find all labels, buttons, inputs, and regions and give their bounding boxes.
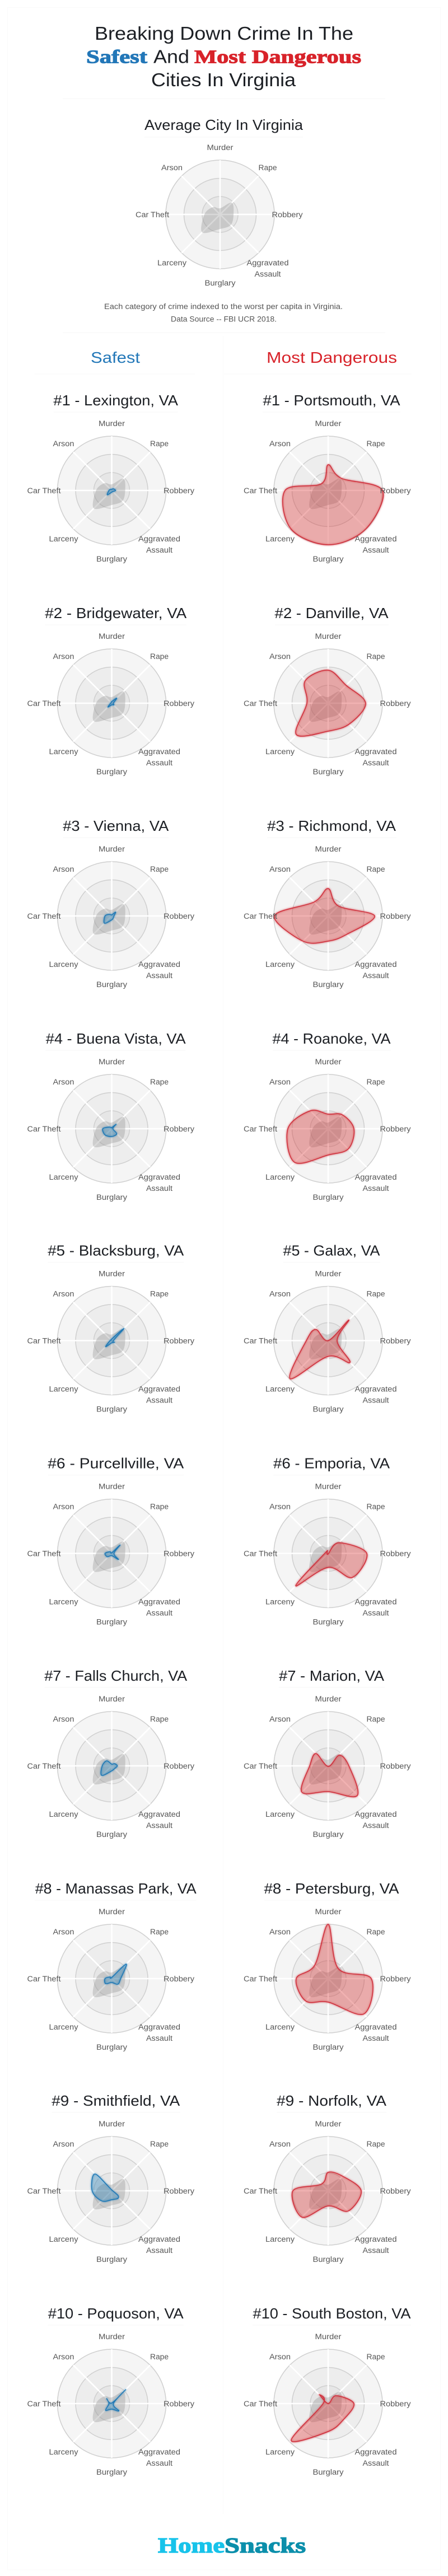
- heading: #3 - Richmond, VA: [267, 817, 396, 834]
- axis labels: Robbery: [380, 1550, 411, 1558]
- axis labels: Assault: [363, 1609, 389, 1617]
- axis labels: [244, 845, 411, 989]
- axis labels: Murder: [99, 419, 125, 428]
- heading: #9 - Smithfield, VA: [52, 2092, 180, 2109]
- axis labels: Assault: [363, 2034, 389, 2042]
- axis labels: Aggravated: [138, 2023, 180, 2031]
- city shape: [296, 1924, 373, 2014]
- axis labels: [27, 632, 194, 776]
- axis labels: Murder: [315, 1908, 342, 1916]
- city shape: [105, 1328, 124, 1347]
- axis labels: Assault: [146, 2459, 172, 2467]
- footnote: [104, 302, 343, 324]
- logo: HomeSnacks: [158, 2534, 306, 2558]
- axis labels: Burglary: [96, 1830, 127, 1839]
- axis labels: Robbery: [164, 1762, 194, 1770]
- axis labels: Rape: [150, 652, 169, 661]
- axis labels: Aggravated: [138, 1810, 180, 1818]
- axis labels: Rape: [366, 1928, 385, 1936]
- axis labels: Aggravated: [355, 2448, 396, 2456]
- axis labels: Rape: [366, 1503, 385, 1511]
- axis labels: Assault: [146, 1609, 172, 1617]
- axis labels: Larceny: [49, 1173, 78, 1181]
- axis labels: Assault: [363, 971, 389, 980]
- axis labels: Aggravated: [138, 747, 180, 756]
- axis labels: Burglary: [96, 1405, 127, 1413]
- axis labels: [244, 2120, 411, 2264]
- axis labels: Car Theft: [136, 211, 169, 219]
- axis labels: [244, 632, 411, 776]
- axis labels: Assault: [363, 1821, 389, 1830]
- axis labels: Larceny: [265, 535, 295, 543]
- axis labels: Assault: [363, 546, 389, 554]
- axis labels: Robbery: [272, 211, 303, 219]
- axis labels: Car Theft: [244, 1975, 277, 1983]
- panel: safest #3 Vienna: [27, 817, 194, 989]
- axis labels: [244, 1270, 411, 1413]
- axis labels: Murder: [99, 1058, 125, 1066]
- city shape: [105, 1964, 127, 1984]
- city shape: [104, 912, 116, 923]
- axis labels: Car Theft: [244, 1762, 277, 1770]
- axis labels: Arson: [269, 1078, 291, 1086]
- axis labels: Burglary: [312, 1405, 344, 1413]
- heading: #8 - Petersburg, VA: [264, 1880, 399, 1897]
- axis labels: [27, 1908, 194, 2051]
- axis labels: Arson: [269, 865, 291, 873]
- axis labels: Burglary: [312, 555, 344, 563]
- axis labels: Robbery: [164, 1125, 194, 1133]
- panel: safest #8 Manassas Park: [27, 1880, 197, 2051]
- axis labels: Car Theft: [244, 912, 277, 920]
- axis labels: Assault: [363, 2246, 389, 2255]
- axis labels: Arson: [161, 163, 183, 172]
- city shape: [108, 698, 117, 707]
- heading: #7 - Falls Church, VA: [44, 1667, 188, 1684]
- axis labels: Murder: [315, 632, 342, 641]
- axis labels: Robbery: [164, 487, 194, 495]
- axis labels: Robbery: [164, 2187, 194, 2195]
- axis labels: Car Theft: [27, 1762, 61, 1770]
- axis labels: Burglary: [312, 2043, 344, 2051]
- heading: #4 - Buena Vista, VA: [46, 1030, 186, 1047]
- axis labels: Burglary: [96, 1618, 127, 1626]
- axis labels: Robbery: [380, 1762, 411, 1770]
- axis labels: Burglary: [96, 1193, 127, 1201]
- axis labels: Arson: [269, 2353, 291, 2361]
- axis labels: Rape: [259, 163, 277, 172]
- axis labels: Aggravated: [355, 747, 396, 756]
- axis labels: Murder: [99, 1483, 125, 1490]
- axis labels: Murder: [99, 1270, 125, 1278]
- axis labels: Rape: [366, 440, 385, 448]
- panel: dangerous #7 Marion: [244, 1667, 411, 1839]
- axis labels: Burglary: [96, 2255, 127, 2264]
- logo: HomeSnacks: Home: [158, 2534, 225, 2558]
- axis labels: Rape: [366, 2140, 385, 2148]
- axis labels: Rape: [366, 2353, 385, 2361]
- radar chart: average city: [136, 143, 303, 287]
- axis labels: Robbery: [164, 1975, 194, 1983]
- axis labels: Arson: [269, 2140, 291, 2148]
- axis labels: [27, 2120, 194, 2264]
- axis labels: Arson: [269, 1290, 291, 1298]
- axis labels: Aggravated: [138, 535, 180, 543]
- axis labels: Murder: [99, 1908, 125, 1916]
- axis labels: Arson: [269, 1715, 291, 1723]
- city shape: [105, 2390, 126, 2411]
- heading: #4 - Roanoke, VA: [272, 1030, 391, 1047]
- axis labels: Larceny: [265, 1598, 295, 1606]
- axis labels: Arson: [269, 652, 291, 661]
- axis labels: Robbery: [164, 1550, 194, 1558]
- axis labels: Arson: [53, 2140, 74, 2148]
- axis labels: Arson: [269, 1928, 291, 1936]
- heading: #6 - Emporia, VA: [273, 1455, 390, 1471]
- axis labels: Larceny: [265, 1173, 295, 1181]
- panel: dangerous #9 Norfolk: [244, 2092, 411, 2264]
- axis labels: Aggravated: [355, 960, 396, 969]
- heading: #8 - Manassas Park, VA: [35, 1880, 197, 1897]
- city shape: [301, 1754, 358, 1797]
- axis labels: Larceny: [49, 960, 78, 969]
- axis labels: Rape: [366, 1715, 385, 1723]
- axis labels: Car Theft: [27, 699, 61, 708]
- column heading: safest: Safest: [91, 349, 140, 366]
- axis labels: Murder: [315, 845, 342, 853]
- axis labels: Car Theft: [244, 1125, 277, 1133]
- axis labels: Arson: [53, 652, 74, 661]
- axis labels: Car Theft: [244, 1550, 277, 1558]
- axis labels: Aggravated: [355, 1598, 396, 1606]
- axis labels: [136, 143, 303, 287]
- heading: #10 - Poquoson, VA: [48, 2305, 184, 2322]
- axis labels: Murder: [315, 1695, 342, 1703]
- axis labels: [27, 419, 194, 563]
- axis labels: Murder: [99, 845, 125, 853]
- axis labels: Robbery: [380, 2187, 411, 2195]
- axis labels: Larceny: [49, 2235, 78, 2243]
- axis labels: Rape: [366, 1078, 385, 1086]
- axis labels: Assault: [146, 1821, 172, 1830]
- axis labels: Aggravated: [246, 259, 289, 267]
- heading: #5 - Galax, VA: [283, 1242, 380, 1259]
- axis labels: Rape: [150, 1503, 169, 1511]
- axis labels: Murder: [315, 1270, 342, 1278]
- axis labels: Car Theft: [27, 487, 61, 495]
- axis labels: Larceny: [49, 535, 78, 543]
- city shape: [107, 489, 116, 495]
- heading: #10 - South Boston, VA: [253, 2305, 411, 2322]
- axis labels: Rape: [150, 1715, 169, 1723]
- panel: safest #1 Lexington: [27, 392, 194, 563]
- axis labels: Arson: [53, 440, 74, 448]
- axis labels: Car Theft: [27, 2400, 61, 2408]
- axis labels: Aggravated: [138, 2448, 180, 2456]
- axis labels: Car Theft: [27, 1550, 61, 1558]
- axis labels: Rape: [366, 865, 385, 873]
- axis labels: Aggravated: [138, 1173, 180, 1181]
- title: Cities In Virginia: [151, 69, 296, 90]
- axis labels: Car Theft: [27, 2187, 61, 2195]
- footnote: Each category of crime indexed to the worst per capita in Virginia.: [104, 302, 343, 311]
- axis labels: Murder: [99, 1695, 125, 1703]
- city shape: [292, 2172, 361, 2218]
- axis labels: Rape: [150, 1290, 169, 1298]
- heading: #1 - Lexington, VA: [53, 392, 179, 409]
- axis labels: Aggravated: [355, 2023, 396, 2031]
- axis labels: Burglary: [96, 768, 127, 776]
- axis labels: Aggravated: [138, 2235, 180, 2243]
- axis labels: [27, 1695, 194, 1839]
- panel: safest #5 Blacksburg: [27, 1242, 194, 1413]
- city shape: [274, 889, 375, 943]
- axis labels: Burglary: [96, 555, 127, 563]
- axis labels: Rape: [150, 2353, 169, 2361]
- panel: dangerous #10 South Boston: [244, 2305, 411, 2476]
- axis labels: [244, 1058, 411, 1201]
- axis labels: Arson: [269, 1503, 291, 1511]
- axis labels: Murder: [99, 632, 125, 641]
- axis labels: Robbery: [380, 1125, 411, 1133]
- heading: #2 - Danville, VA: [275, 605, 389, 621]
- axis labels: Burglary: [96, 2468, 127, 2476]
- axis labels: Arson: [53, 1715, 74, 1723]
- city shape: [296, 1542, 367, 1586]
- axis labels: Larceny: [265, 2023, 295, 2031]
- city shape: [291, 2395, 354, 2442]
- axis labels: Assault: [146, 971, 172, 980]
- title: Most Dangerous: [194, 47, 361, 67]
- city shape: [105, 1545, 120, 1560]
- axis labels: Aggravated: [355, 1173, 396, 1181]
- city shape: [101, 1761, 118, 1775]
- axis labels: Larceny: [157, 259, 186, 267]
- axis labels: [244, 1483, 411, 1626]
- heading: #3 - Vienna, VA: [63, 817, 169, 834]
- axis labels: Assault: [363, 2459, 389, 2467]
- title: Breaking Down Crime In The: [95, 23, 353, 44]
- axis labels: Car Theft: [27, 1125, 61, 1133]
- axis labels: Robbery: [380, 912, 411, 920]
- axis labels: [27, 1058, 194, 1201]
- axis labels: Assault: [146, 2034, 172, 2042]
- axis labels: Robbery: [380, 487, 411, 495]
- axis labels: Car Theft: [244, 699, 277, 708]
- axis labels: Car Theft: [27, 912, 61, 920]
- axis labels: Burglary: [96, 980, 127, 989]
- axis labels: Assault: [146, 546, 172, 554]
- axis labels: Robbery: [380, 1337, 411, 1345]
- panel: safest #4 Buena Vista: [27, 1030, 194, 1201]
- panel: dangerous #6 Emporia: [244, 1455, 411, 1626]
- footnote: Data Source -- FBI UCR 2018.: [171, 315, 277, 324]
- heading: #6 - Purcellville, VA: [48, 1455, 184, 1471]
- panel: safest #7 Falls Church: [27, 1667, 194, 1839]
- city shape: [287, 1110, 354, 1163]
- axis labels: Assault: [146, 2246, 172, 2255]
- axis labels: Rape: [366, 652, 385, 661]
- axis labels: Larceny: [265, 1810, 295, 1818]
- axis labels: Arson: [53, 2353, 74, 2361]
- city shape: [283, 465, 383, 545]
- axis labels: Arson: [53, 1928, 74, 1936]
- axis labels: [244, 1908, 411, 2051]
- axis labels: Murder: [315, 2332, 342, 2341]
- axis labels: Burglary: [312, 980, 344, 989]
- axis labels: Murder: [99, 2120, 125, 2128]
- axis labels: Aggravated: [138, 1598, 180, 1606]
- panel: safest #10 Poquoson: [27, 2305, 194, 2476]
- axis labels: Burglary: [204, 279, 236, 287]
- axis labels: Aggravated: [355, 1810, 396, 1818]
- axis labels: Burglary: [96, 2043, 127, 2051]
- heading: #2 - Bridgewater, VA: [45, 605, 187, 621]
- axis labels: Murder: [207, 143, 234, 152]
- axis labels: [244, 2332, 411, 2476]
- axis labels: Burglary: [312, 1618, 344, 1626]
- panel: dangerous #2 Danville: [244, 605, 411, 776]
- axis labels: Aggravated: [355, 535, 396, 543]
- axis labels: Burglary: [312, 2255, 344, 2264]
- axis labels: Aggravated: [138, 960, 180, 969]
- axis labels: Assault: [146, 1184, 172, 1193]
- city shape: [296, 670, 366, 736]
- axis labels: Aggravated: [355, 1385, 396, 1393]
- axis labels: Larceny: [49, 2448, 78, 2456]
- heading: average city: Average City In Virginia: [144, 116, 304, 133]
- axis labels: Robbery: [164, 699, 194, 708]
- axis labels: Arson: [53, 1290, 74, 1298]
- axis labels: Larceny: [49, 747, 78, 756]
- title: Safest: [86, 47, 148, 67]
- axis labels: Murder: [99, 2332, 125, 2341]
- axis labels: Larceny: [265, 2235, 295, 2243]
- axis labels: Burglary: [312, 1193, 344, 1201]
- axis labels: Larceny: [49, 2023, 78, 2031]
- axis labels: Rape: [150, 440, 169, 448]
- axis labels: Larceny: [265, 2448, 295, 2456]
- axis labels: Larceny: [265, 1385, 295, 1393]
- heading: #7 - Marion, VA: [279, 1667, 385, 1684]
- axis labels: Robbery: [164, 1337, 194, 1345]
- axis labels: Murder: [315, 419, 342, 428]
- axis labels: Murder: [315, 1058, 342, 1066]
- panel: safest #6 Purcellville: [27, 1455, 194, 1626]
- axis labels: Car Theft: [27, 1337, 61, 1345]
- logo: HomeSnacks: Snacks: [225, 2534, 306, 2558]
- axis labels: Robbery: [380, 2400, 411, 2408]
- axis labels: Rape: [150, 1078, 169, 1086]
- axis labels: Larceny: [265, 747, 295, 756]
- axis labels: [27, 845, 194, 989]
- axis labels: Robbery: [380, 1975, 411, 1983]
- axis labels: Assault: [146, 1396, 172, 1404]
- axis labels: Car Theft: [244, 1337, 277, 1345]
- axis labels: Car Theft: [244, 2187, 277, 2195]
- axis labels: Arson: [53, 865, 74, 873]
- axis labels: Aggravated: [355, 2235, 396, 2243]
- panel: dangerous #5 Galax: [244, 1242, 411, 1413]
- panel: safest #2 Bridgewater: [27, 605, 194, 776]
- axis labels: [27, 1270, 194, 1413]
- axis labels: Assault: [146, 759, 172, 767]
- axis labels: Assault: [254, 270, 281, 278]
- city shape: [92, 2174, 119, 2201]
- axis labels: Larceny: [49, 1810, 78, 1818]
- axis labels: Assault: [363, 1396, 389, 1404]
- panel: dangerous #4 Roanoke: [244, 1030, 411, 1201]
- axis labels: Robbery: [380, 699, 411, 708]
- panel: dangerous #8 Petersburg: [244, 1880, 411, 2051]
- panel: dangerous #3 Richmond: [244, 817, 411, 989]
- panel: safest #9 Smithfield: [27, 2092, 194, 2264]
- axis labels: Larceny: [49, 1385, 78, 1393]
- axis labels: [244, 419, 411, 563]
- axis labels: Aggravated: [138, 1385, 180, 1393]
- city shape: [102, 1124, 117, 1137]
- heading: #1 - Portsmouth, VA: [263, 392, 400, 409]
- axis labels: Burglary: [312, 768, 344, 776]
- axis labels: Car Theft: [244, 2400, 277, 2408]
- heading: #9 - Norfolk, VA: [277, 2092, 387, 2109]
- axis labels: Robbery: [164, 2400, 194, 2408]
- axis labels: Car Theft: [27, 1975, 61, 1983]
- axis labels: Larceny: [49, 1598, 78, 1606]
- title: And: [153, 46, 189, 67]
- column heading: most dangerous: Most Dangerous: [267, 349, 397, 366]
- axis labels: Robbery: [164, 912, 194, 920]
- axis labels: Car Theft: [244, 487, 277, 495]
- axis labels: Arson: [53, 1078, 74, 1086]
- axis labels: [27, 2332, 194, 2476]
- axis labels: Assault: [363, 1184, 389, 1193]
- panel: dangerous #1 Portsmouth: [244, 392, 411, 563]
- axis labels: Larceny: [265, 960, 295, 969]
- axis labels: Burglary: [312, 2468, 344, 2476]
- axis labels: Murder: [315, 1483, 342, 1490]
- city shape: [290, 1320, 350, 1379]
- axis labels: Arson: [269, 440, 291, 448]
- axis labels: [27, 1483, 194, 1626]
- title: [86, 23, 361, 90]
- axis labels: Rape: [366, 1290, 385, 1298]
- axis labels: Rape: [150, 1928, 169, 1936]
- axis labels: Burglary: [312, 1830, 344, 1839]
- axis labels: Rape: [150, 865, 169, 873]
- heading: #5 - Blacksburg, VA: [48, 1242, 184, 1259]
- axis labels: Murder: [315, 2120, 342, 2128]
- axis labels: Rape: [150, 2140, 169, 2148]
- axis labels: Arson: [53, 1503, 74, 1511]
- axis labels: Assault: [363, 759, 389, 767]
- axis labels: [244, 1695, 411, 1839]
